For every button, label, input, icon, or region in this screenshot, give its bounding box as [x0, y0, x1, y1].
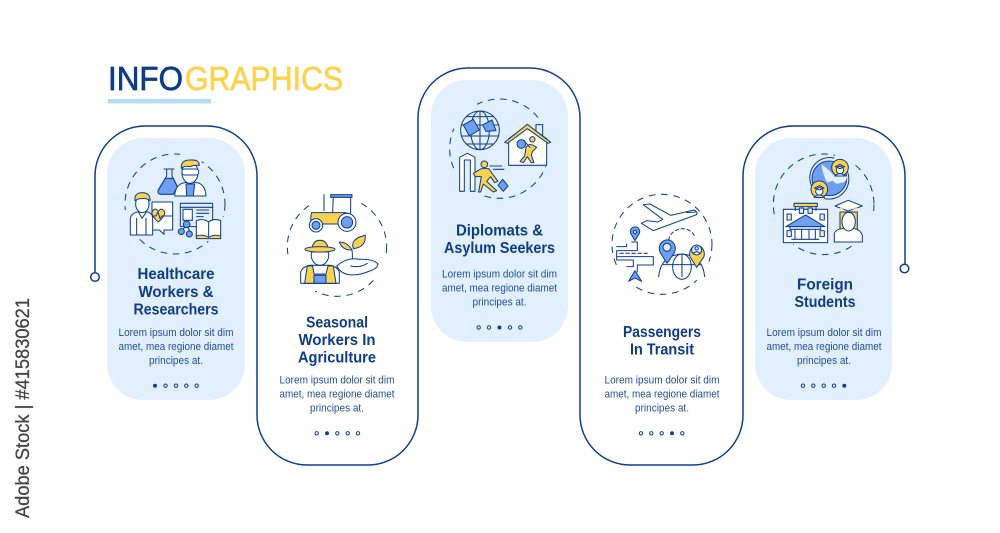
- stock id side label: Adobe Stock | #415830621: [13, 298, 34, 518]
- pagination dots: [477, 326, 522, 330]
- text block: Lorem ipsum dolor sit dim: [280, 374, 394, 386]
- serpentine outline connector: [91, 68, 909, 465]
- pagination dots: [315, 431, 360, 435]
- pagination dots: [153, 384, 198, 388]
- text block: principes at.: [310, 402, 364, 414]
- text block: Lorem ipsum dolor sit dim: [118, 327, 234, 339]
- heading: Researchers: [134, 302, 218, 318]
- heading: [623, 324, 701, 358]
- heading: Workers In: [298, 332, 376, 349]
- text block: [604, 374, 720, 414]
- heading: Students: [794, 294, 856, 311]
- text block: [442, 268, 557, 308]
- text block: Lorem ipsum dolor sit dim: [442, 268, 557, 280]
- icon: plane, route and globe pins: [612, 194, 712, 294]
- heading: [794, 276, 856, 311]
- pagination dots: [801, 384, 846, 388]
- heading: Seasonal: [306, 314, 368, 332]
- text block: Lorem ipsum dolor sit dim: [604, 374, 720, 386]
- title: INFO: [108, 60, 183, 97]
- icon: globe, house and traveller: [450, 99, 551, 198]
- text block: amet, mea regione diamet: [118, 341, 234, 353]
- panel: diplomats and asylum seekers: [431, 80, 568, 342]
- panel: foreign students: [755, 138, 892, 400]
- text block: [280, 374, 394, 414]
- heading: In Transit: [630, 342, 694, 358]
- text block: amet, mea regione diamet: [280, 388, 394, 400]
- text block: principes at.: [149, 355, 203, 367]
- text block: [766, 327, 882, 367]
- panel: seasonal workers: [280, 195, 394, 435]
- text block: Lorem ipsum dolor sit dim: [766, 327, 882, 339]
- heading: Foreign: [797, 276, 853, 294]
- panel: passengers in transit: [604, 194, 720, 435]
- pagination dots: [639, 431, 684, 435]
- title: GRAPHICS: [185, 60, 343, 97]
- heading: [134, 266, 218, 318]
- text block: principes at.: [635, 402, 689, 414]
- heading: Asylum Seekers: [444, 240, 555, 257]
- heading: Passengers: [623, 324, 701, 341]
- icon: tractor and farmer: [287, 195, 387, 296]
- text block: amet, mea regione diamet: [442, 282, 557, 294]
- text block: amet, mea regione diamet: [766, 341, 882, 353]
- text block: principes at.: [472, 296, 526, 308]
- title: [108, 60, 343, 104]
- text block: principes at.: [797, 355, 851, 367]
- text block: [118, 327, 234, 367]
- icon: healthcare and research: [125, 154, 225, 254]
- heading: Healthcare: [138, 266, 215, 283]
- heading: Agriculture: [298, 350, 376, 366]
- heading: Workers &: [138, 284, 214, 301]
- heading: Diplomats &: [456, 223, 543, 240]
- heading: [444, 223, 555, 257]
- heading: [298, 314, 376, 366]
- icon: globe, university and graduate: [773, 154, 874, 255]
- text block: amet, mea regione diamet: [604, 388, 720, 400]
- panel: healthcare workers: [107, 138, 245, 400]
